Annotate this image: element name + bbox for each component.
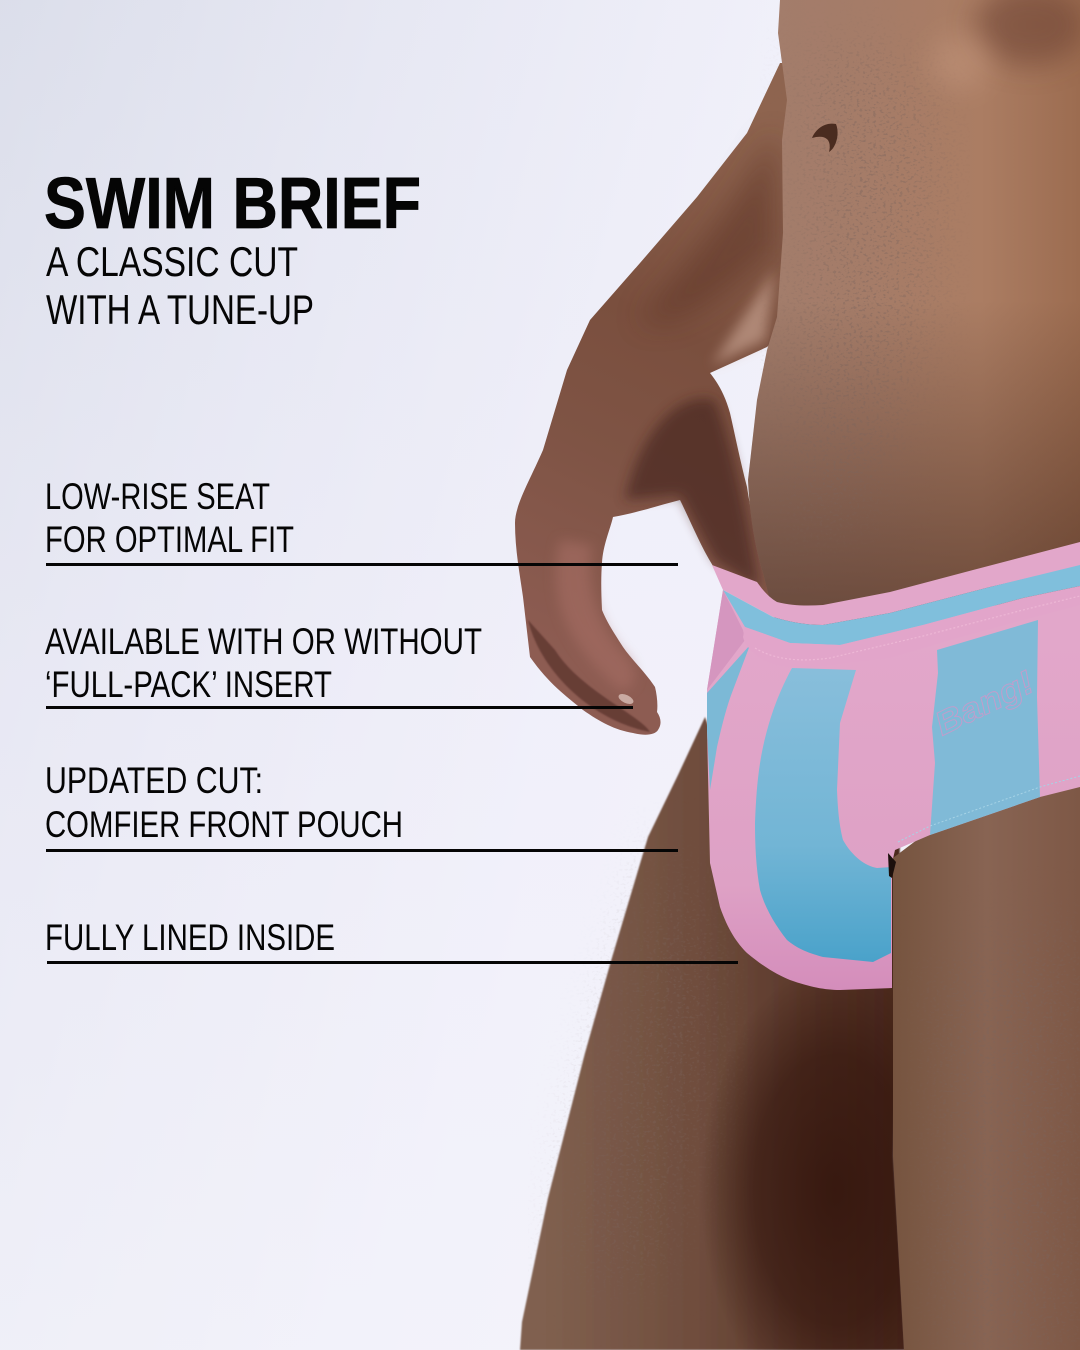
subtitle bbox=[46, 238, 314, 333]
title: SWIM BRIEF bbox=[44, 164, 421, 244]
swim brief: logo: Bang! bbox=[929, 663, 1039, 742]
model: upper torso shadow bbox=[975, 0, 1080, 65]
swim brief: left side panel shade bbox=[707, 590, 745, 690]
swim brief: centre blue panel bbox=[755, 668, 891, 962]
model: hand shadow bbox=[625, 398, 760, 590]
model: upper torso highlight bbox=[930, 34, 990, 90]
swim brief: left side blue panel bbox=[707, 645, 750, 790]
model: lower finger shadow bbox=[528, 620, 650, 732]
model: abdomen hair bbox=[790, 50, 940, 540]
swim brief: crevice shadow bbox=[888, 853, 896, 878]
feature: full-pack insert: AVAILABLE WITH OR WITHOUT bbox=[45, 621, 482, 662]
swim brief: waistband pink top bbox=[712, 542, 1080, 625]
swim brief: waistband blue stripe bbox=[723, 565, 1080, 645]
model: torso lower shading bbox=[748, 300, 1080, 640]
feature: updated cut bbox=[45, 760, 678, 852]
feature: fully lined: FULLY LINED INSIDE bbox=[45, 917, 335, 958]
feature: low-rise seat: LOW-RISE SEAT bbox=[45, 476, 270, 517]
model: left leg hair bbox=[560, 830, 720, 1290]
model: navel bbox=[812, 124, 838, 152]
model: right leg hair bbox=[930, 910, 1080, 1350]
model: forearm shadow bbox=[640, 130, 775, 322]
subtitle: WITH A TUNE-UP bbox=[46, 286, 314, 333]
model: wrist highlight bbox=[712, 270, 775, 365]
model: left leg deep shadow bbox=[700, 965, 970, 1350]
swim brief: waistband stitching bbox=[755, 596, 1080, 660]
model: thumb highlight bbox=[556, 540, 635, 690]
feature: fully lined bbox=[45, 917, 738, 964]
swim brief: waistband pink lower bbox=[743, 586, 1080, 668]
subtitle: A CLASSIC CUT bbox=[46, 238, 298, 285]
photo: model wearing swim brief bbox=[515, 0, 1080, 1350]
feature: updated cut: UPDATED CUT: bbox=[45, 760, 263, 801]
swim brief: pink base bbox=[707, 590, 1080, 990]
model: right leg bbox=[893, 782, 1080, 1350]
swim brief: leg hem stitching bbox=[898, 776, 1080, 842]
model: arm and hand bbox=[515, 63, 795, 735]
feature: low-rise seat bbox=[45, 476, 678, 566]
swim brief: side blue panel bbox=[930, 620, 1040, 835]
model: torso bbox=[748, 0, 1080, 640]
feature: low-rise seat: FOR OPTIMAL FIT bbox=[45, 519, 294, 560]
feature: full-pack insert bbox=[45, 621, 633, 709]
feature: updated cut: COMFIER FRONT POUCH bbox=[45, 804, 403, 845]
feature: full-pack insert: ‘FULL-PACK’ INSERT bbox=[45, 664, 332, 705]
model: thumbnail bbox=[617, 692, 635, 706]
model: left leg bbox=[520, 717, 905, 1350]
